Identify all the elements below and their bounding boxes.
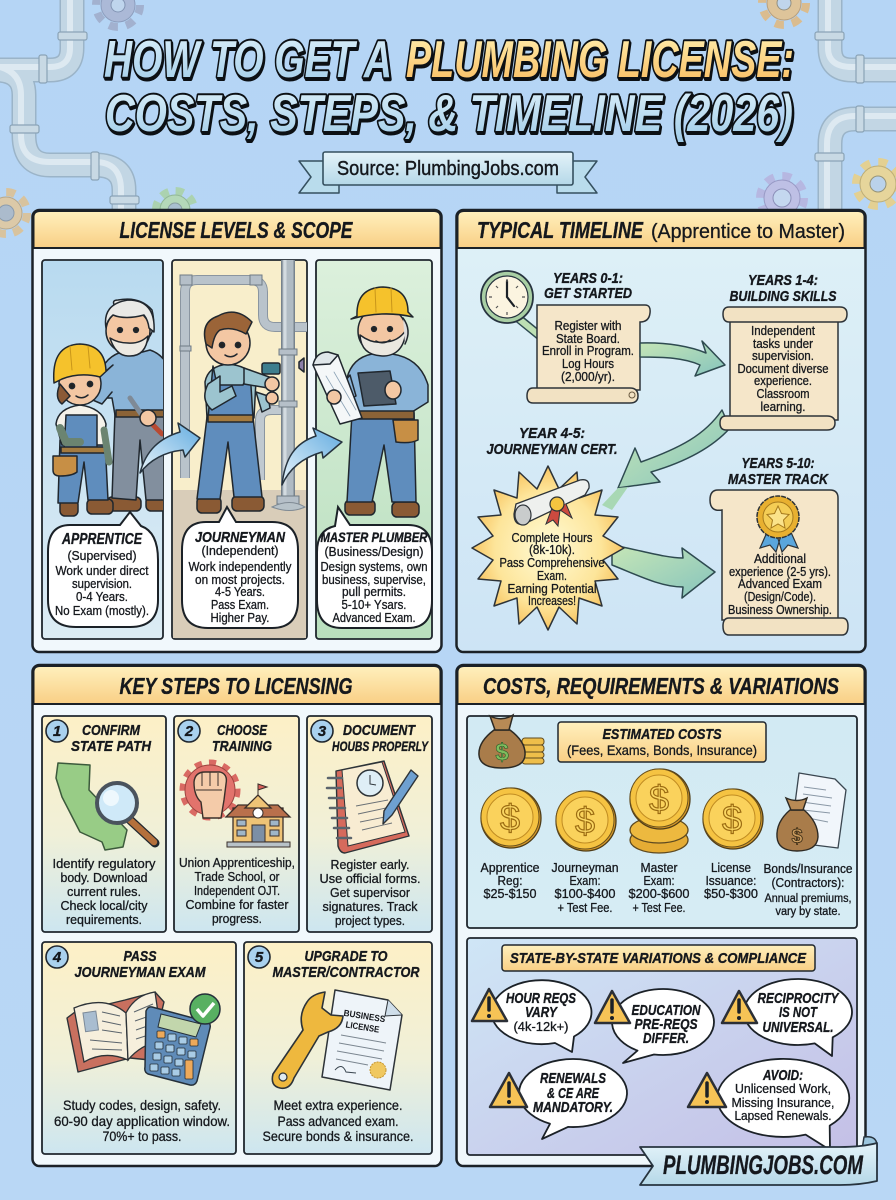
speech bubble: journeyman: Higher Pay. [210, 610, 270, 625]
speech bubble: renewals [519, 1059, 627, 1139]
icon: medal [757, 496, 799, 552]
label: estimated costs: (Fees, Exams, Bonds, Insurance) [567, 742, 757, 758]
illustration: journeyman with drill [197, 312, 304, 513]
scroll: years 0-1: (2,000/yr). [561, 369, 615, 384]
speech bubble: journeyman: Pass Exam. [211, 597, 269, 612]
scroll: years 0-1: Log Hours [562, 356, 614, 371]
header: key steps: KEY STEPS TO LICENSING [120, 673, 353, 699]
source ribbon: Source: PlumbingJobs.com [337, 158, 559, 180]
heading: years 0-1: YEARS 0-1: [553, 270, 623, 287]
icon: business license document: BUSINESS [343, 1008, 386, 1024]
heading: year 4-5: JOURNEYMAN CERT. [486, 441, 618, 458]
step 3: document hours: Get supervisor [330, 885, 411, 900]
step 4: pass journeyman exam [42, 942, 236, 1154]
icon: money bag with coins [479, 715, 544, 768]
step 4: pass journeyman exam: JOURNEYMAN EXAM [74, 964, 206, 981]
step 2: choose training: progress. [212, 911, 262, 926]
step 3: document hours: 3 [318, 723, 327, 740]
starburst: journeyman cert: (8k-10k). [529, 542, 575, 557]
icon: warning 2 [595, 991, 630, 1023]
step 4: pass journeyman exam: 4 [52, 949, 62, 966]
speech bubble: apprentice: (Supervised) [68, 548, 136, 563]
heading: years 5-10: MASTER TRACK [728, 471, 829, 488]
step 1: confirm state path: current rules. [67, 884, 141, 899]
scroll: years 0-1 [527, 305, 650, 403]
step 5: upgrade to master/contractor: Meet extra experience. [274, 1097, 402, 1113]
panel: typical timeline [456, 210, 866, 652]
label: bonds and insurance: vary by state. [776, 906, 840, 918]
step 3: document hours: DOCUMENT [343, 722, 417, 739]
scroll: years 1-4: supervision. [752, 348, 814, 363]
speech bubble: master plumber: Advanced Exam. [332, 610, 416, 625]
scroll: years 5-10: (Design/Code). [744, 589, 816, 604]
step 2: choose training: 2 [184, 723, 194, 740]
step 1: confirm state path: STATE PATH [71, 738, 152, 755]
icon: open book [67, 992, 164, 1072]
speech bubble: master plumber: business, supervise, [322, 572, 426, 587]
label: apprentice reg: $25-$150 [484, 886, 536, 901]
label: estimated costs: ESTIMATED COSTS [602, 726, 722, 743]
icon: business license document: LICENSE [345, 1019, 380, 1035]
icon: logbook and pen [327, 761, 418, 853]
starburst: journeyman cert: Earning Potential [508, 581, 597, 596]
speech bubble: apprentice: APPRENTICE [61, 531, 143, 548]
icon: state map with magnifier [56, 763, 155, 850]
title: HOW TO GET A [104, 31, 392, 89]
starburst: journeyman cert: Pass Comprehensive [500, 555, 604, 570]
arrow: step one to step two [640, 341, 725, 376]
step 3: document hours: signatures. Track [322, 899, 418, 914]
heading: years 1-4 [730, 272, 836, 305]
speech bubble: renewals: & CE ARE [547, 1085, 600, 1102]
label: master exam: + Test Fee. [632, 900, 686, 915]
step 5: upgrade to master/contractor [244, 942, 432, 1154]
title [104, 31, 794, 143]
step 5: upgrade to master/contractor: 5 [255, 949, 264, 966]
gear: top left [96, 0, 140, 27]
speech bubble: journeyman [182, 507, 298, 628]
step 4: pass journeyman exam: 60-90 day application window. [54, 1113, 230, 1129]
speech bubble: hour requirements: VARY [525, 1004, 559, 1021]
icon: warning 3 [722, 991, 757, 1023]
label: master exam [628, 860, 690, 915]
label: journeyman exam: + Test Fee. [558, 900, 612, 915]
step 2: choose training: Independent OJT. [194, 883, 280, 898]
icon: bond document and bag: $ [791, 826, 803, 848]
illustration: pipes on wall [180, 258, 310, 510]
step 3: document hours: project types. [335, 913, 405, 928]
arrow: journeyman to master [282, 428, 342, 485]
coin: apprentice registration: $ [500, 797, 520, 838]
card: state-by-state variations [467, 938, 857, 1155]
speech bubble: education: DIFFER. [643, 1030, 689, 1047]
scroll: years 0-1: Register with [554, 318, 622, 333]
scroll: years 1-4: experience. [754, 373, 812, 388]
label: journeyman exam: Journeyman [552, 860, 618, 875]
starburst: journeyman cert: Complete Hours [512, 530, 593, 545]
arrow: clock connector [518, 318, 540, 336]
scroll: years 0-1: State Board. [556, 331, 620, 346]
speech bubble: avoid [717, 1059, 849, 1150]
starburst: journeyman cert [472, 466, 624, 630]
speech bubble: apprentice [48, 512, 158, 627]
step 1: confirm state path: body. Download [60, 870, 148, 885]
speech bubble: reciprocity: UNIVERSAL. [762, 1019, 834, 1036]
heading: years 0-1 [544, 270, 632, 302]
panel: key steps to licensing [32, 665, 442, 1166]
pipes [0, 0, 896, 212]
header: license levels: LICENSE LEVELS & SCOPE [120, 217, 353, 243]
speech bubble: master plumber: Design systems, own [320, 559, 428, 574]
speech bubble: education: EDUCATION [632, 1002, 701, 1019]
starburst: journeyman cert: Exam. [537, 568, 567, 583]
step 3: document hours: HOUBS PROPERLY [332, 739, 430, 754]
step 5: upgrade to master/contractor: Secure bonds & insurance. [262, 1128, 414, 1144]
speech bubble: master plumber: MASTER PLUMBER [320, 529, 428, 545]
speech bubble: apprentice: No Exam (mostly). [55, 603, 149, 618]
scroll: years 1-4: Independent [751, 323, 815, 338]
speech bubble: journeyman: JOURNEYMAN [195, 529, 286, 546]
step 2: choose training: Union Apprenticeship, [179, 855, 295, 870]
label: apprentice reg: Apprentice [480, 860, 540, 875]
step 5: upgrade to master/contractor: Pass advanced exam. [278, 1113, 398, 1129]
step 1: confirm state path: Identify regulatory [52, 856, 156, 871]
banner: plumbingjobs.com [640, 1137, 877, 1185]
arrow: tail below head [602, 487, 628, 510]
speech bubble: journeyman: 4-5 Years. [215, 584, 265, 599]
speech bubble: renewals: RENEWALS [540, 1070, 606, 1087]
header: timeline [458, 211, 864, 248]
icon: business license document [322, 990, 402, 1090]
heading: years 1-4: BUILDING SKILLS [730, 288, 836, 305]
label: bonds and insurance [764, 861, 852, 918]
gear: purple [760, 176, 804, 220]
coin: apprentice registration [481, 788, 541, 848]
heading: years 5-10: YEARS 5-10: [742, 455, 814, 472]
speech bubble: avoid: AVOID: [762, 1067, 803, 1084]
column: apprentice [42, 260, 172, 639]
step 4: pass journeyman exam: PASS [124, 948, 156, 965]
heading: years 0-1: GET STARTED [544, 285, 632, 302]
step 1: confirm state path: CONFIRM [82, 722, 140, 739]
coin stack: master exam: $ [649, 778, 669, 819]
step 5: upgrade to master/contractor: MASTER/CONTRACTOR [272, 964, 420, 981]
icon: bond document and bag [777, 773, 846, 851]
heading: years 5-10 [728, 455, 829, 488]
step 1: confirm state path [42, 716, 166, 932]
label: license issuance: Issuance: [706, 873, 756, 888]
icon: wrench [272, 992, 343, 1088]
illustration: apprentice and mentor [53, 299, 172, 516]
label: journeyman exam: $100-$400 [554, 886, 616, 901]
header: key steps [34, 666, 440, 704]
scroll: years 5-10: Additional [754, 551, 806, 566]
step 3: document hours: Register early. [330, 857, 410, 872]
header: costs [458, 666, 864, 704]
coin: license issuance: $ [722, 798, 742, 839]
step 2: choose training: TRAINING [212, 738, 272, 755]
source ribbon [299, 152, 597, 193]
header: timeline: TYPICAL TIMELINE [477, 217, 644, 243]
step 2: choose training: Combine for faster [186, 897, 289, 912]
starburst: journeyman cert: Increases! [528, 593, 576, 608]
card: estimated costs [467, 715, 857, 928]
label: journeyman exam [552, 860, 618, 915]
label: master exam: Master [640, 860, 678, 875]
gears and pipes decoration [0, 0, 896, 234]
header: timeline: (Apprentice to Master) [651, 221, 845, 243]
label: license issuance: $50-$300 [704, 886, 758, 901]
label: estimated costs [558, 722, 766, 762]
scroll: years 5-10 [710, 490, 848, 635]
label: bonds and insurance: Bonds/Insurance [764, 861, 852, 876]
label: bonds and insurance: (Contractors): [772, 875, 844, 890]
speech bubble: education: PRE-REQS [634, 1016, 698, 1033]
speech bubble: hour requirements: HOUR REQS [506, 990, 576, 1007]
speech bubble: apprentice: supervision. [72, 576, 132, 591]
gear: left [0, 192, 27, 234]
header: license levels [34, 211, 440, 248]
speech bubble: reciprocity: RECIPROCITY [758, 990, 840, 1007]
icon: money bag with coins: $ [495, 739, 509, 766]
arrow: apprentice to journeyman [140, 423, 200, 473]
speech bubble: master plumber: 5-10+ Ysars. [342, 597, 406, 612]
scroll: years 1-4: Document diverse [738, 361, 828, 376]
speech bubble: master plumber: (Business/Design) [324, 544, 424, 559]
speech bubble: renewals: MANDATORY. [533, 1099, 613, 1116]
step 2: choose training: Trade School, or [194, 869, 280, 884]
icon: warning 5 [688, 1073, 726, 1107]
speech bubble: avoid: Lapsed Renewals. [734, 1108, 832, 1123]
scroll: years 1-4: learning. [760, 399, 806, 414]
coin: journeyman exam [556, 791, 616, 851]
speech bubble: education [612, 989, 714, 1063]
icon: warning 1 [472, 989, 507, 1021]
heading: year 4-5: YEAR 4-5: [519, 425, 585, 442]
illustration: master plumber [313, 287, 428, 517]
step 5: upgrade to master/contractor: UPGRADE TO [304, 948, 388, 965]
icon: calculator with check [145, 994, 220, 1085]
speech bubble: hour requirements [491, 980, 591, 1052]
step 3: document hours: Use official forms. [320, 871, 420, 886]
gear: yellow [856, 162, 896, 206]
step 1: confirm state path: requirements. [66, 912, 142, 927]
step 3: document hours [307, 716, 432, 932]
scroll: years 1-4 [720, 307, 847, 430]
heading: years 1-4: YEARS 1-4: [748, 272, 818, 289]
label: apprentice reg: Reg: [498, 873, 522, 888]
label: license issuance: License [711, 860, 751, 875]
gear: top right [762, 0, 806, 25]
step 1: confirm state path: Check local/city [60, 898, 148, 913]
icon: clock [481, 271, 533, 323]
label: bonds and insurance: Annual premiums, [764, 893, 852, 905]
pipe collars [10, 32, 864, 204]
speech bubble: apprentice: Work under direct [56, 563, 149, 578]
label: master exam: $200-$600 [628, 886, 690, 901]
speech bubble: journeyman: Work independently [188, 559, 292, 574]
icon: diploma [514, 480, 589, 526]
scroll: years 5-10: experience (2-5 yrs). [729, 564, 831, 579]
arrow: step two to certification [618, 410, 730, 488]
scroll: years 0-1: Enroll in Program. [542, 343, 634, 358]
scroll: years 5-10: Advanced Exam [738, 576, 822, 591]
speech bubble: avoid: Unlicensed Work, [735, 1081, 831, 1096]
coin stack: master exam [630, 769, 690, 853]
coin: journeyman exam: $ [575, 800, 595, 841]
speech bubble: apprentice: 0-4 Years. [76, 589, 128, 604]
icon: warning 4 [490, 1073, 527, 1107]
panel: license levels and scope [32, 210, 442, 652]
speech bubble: master plumber: pull permits. [342, 584, 406, 599]
heading: year 4-5 [486, 425, 618, 458]
speech bubble: master plumber [317, 507, 432, 628]
icon: fist and gear with school [183, 763, 290, 847]
column: master plumber [313, 260, 432, 639]
label: apprentice reg [480, 860, 540, 901]
step 4: pass journeyman exam: 70%+ to pass. [102, 1128, 182, 1144]
arrow: certification to master track [612, 545, 715, 598]
speech bubble: hour requirements: (4k-12k+) [514, 1019, 568, 1034]
label: state-by-state: STATE-BY-STATE VARIATIONS & COMPLIANCE [510, 950, 807, 967]
speech bubble: journeyman: on most projects. [195, 572, 285, 587]
column: journeyman [172, 258, 310, 639]
label: state-by-state [502, 945, 815, 971]
label: journeyman exam: Exam: [570, 873, 600, 888]
scroll: years 1-4: Classroom [756, 386, 810, 401]
panel: costs, requirements and variations [456, 665, 866, 1166]
scroll: years 5-10: Business Ownership. [728, 602, 832, 617]
coin: license issuance [703, 789, 763, 849]
step 2: choose training [174, 716, 299, 932]
scroll: years 1-4: tasks under [753, 336, 814, 351]
gear: green [156, 191, 194, 229]
step 4: pass journeyman exam: Study codes, design, safety. [63, 1097, 221, 1113]
speech bubble: journeyman: (Independent) [202, 543, 278, 558]
speech bubble: avoid: Missing Insurance, [732, 1095, 834, 1110]
label: license issuance [704, 860, 758, 901]
speech bubble: reciprocity: IS NOT [779, 1004, 818, 1021]
step 2: choose training: CHOOSE [217, 722, 268, 739]
label: master exam: Exam: [644, 873, 674, 888]
speech bubble: reciprocity [744, 979, 852, 1056]
step 1: confirm state path: 1 [53, 723, 61, 740]
